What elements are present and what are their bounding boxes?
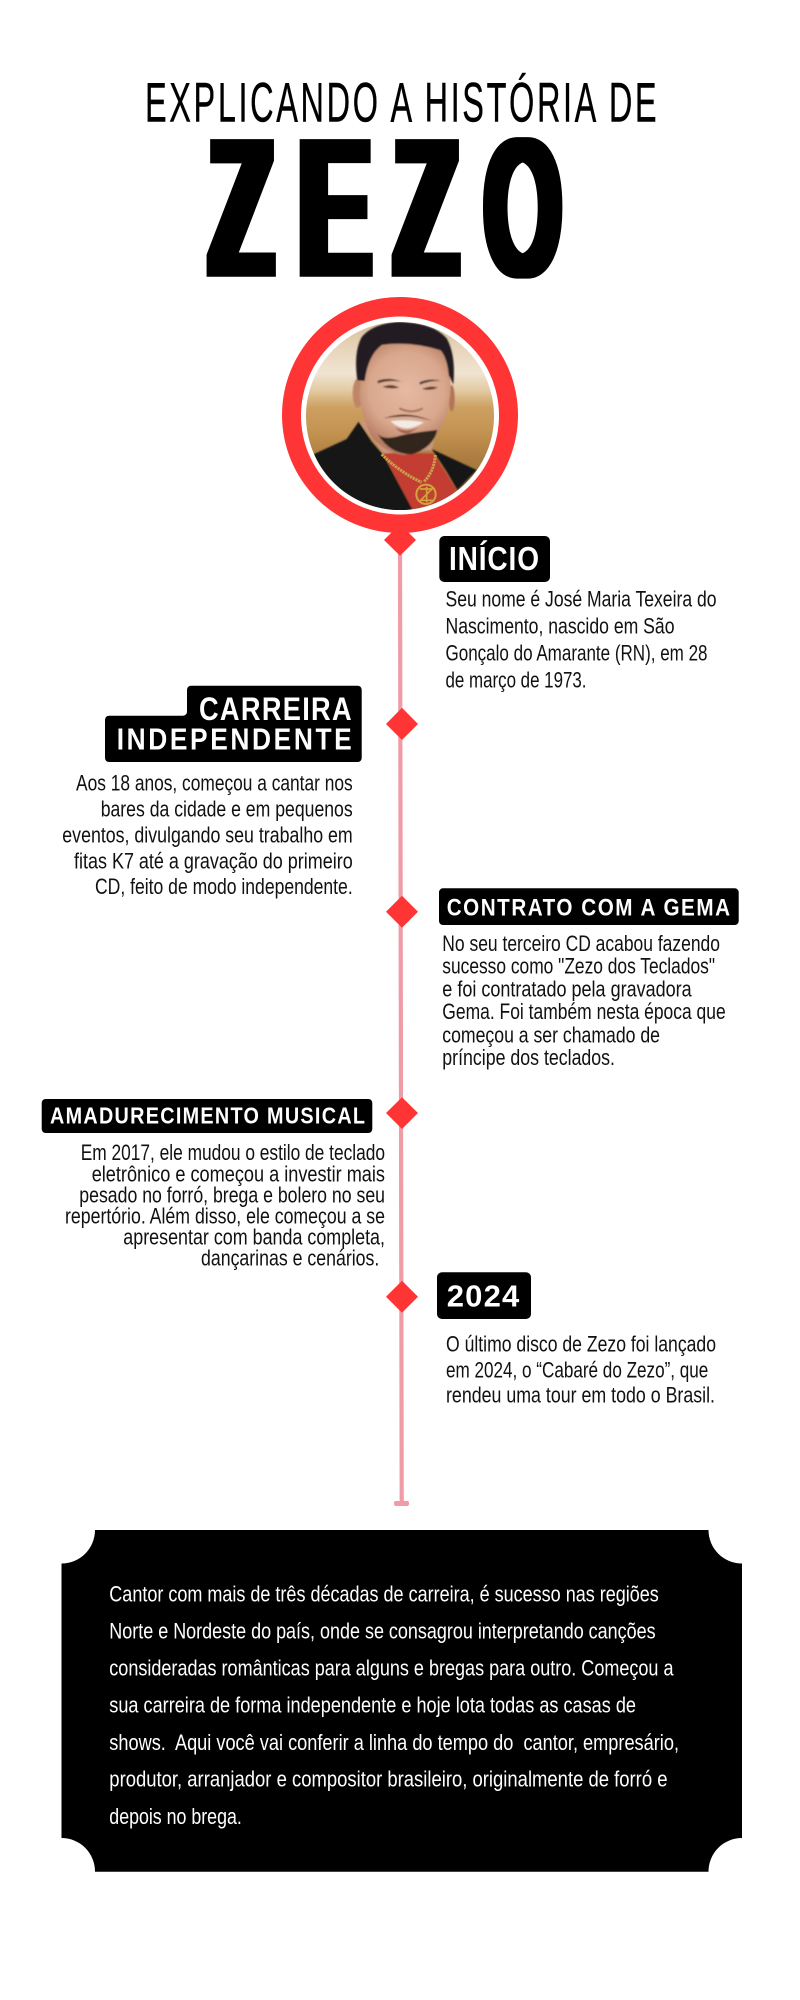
title: ZEZO: Z	[212, 98, 271, 318]
text block: carreira independente: CD, feito de modo independente.	[95, 874, 353, 899]
title: ZEZO: O	[484, 99, 562, 319]
heading: amadurecimento musical: AMADURECIMENTO MUSICAL	[50, 1102, 365, 1129]
timeline marker: 2024	[386, 1281, 418, 1313]
timeline marker: amadurecimento musical	[386, 1097, 418, 1129]
text block: início: de março de 1973.	[446, 668, 586, 692]
title: ZEZO	[212, 97, 562, 319]
text block: amadurecimento musical: repertório. Além disso, ele começou a se	[65, 1203, 385, 1228]
text block: summary: depois no brega.	[109, 1804, 242, 1829]
text block: contrato com a gema: No seu terceiro CD acabou fazendo	[442, 931, 720, 956]
heading: início: INÍCIO	[449, 540, 539, 578]
text block: amadurecimento musical	[65, 1140, 385, 1271]
text block: 2024: rendeu uma tour em todo o Brasil.	[446, 1383, 715, 1408]
section: contrato com a gema	[439, 888, 739, 1070]
text block: início: Nascimento, nascido em São	[446, 614, 674, 638]
text block: início: Seu nome é José Maria Texeira do	[446, 587, 716, 612]
text block: carreira independente: Aos 18 anos, começou a cantar nos	[76, 771, 353, 796]
photo: portrait of the singer	[303, 320, 497, 515]
text block: 2024: O último disco de Zezo foi lançado	[446, 1332, 716, 1357]
text block: amadurecimento musical: pesado no forró, brega e bolero no seu	[79, 1182, 385, 1207]
heading: carreira independente: CARREIRA	[199, 692, 352, 728]
timeline marker: carreira independente	[386, 708, 418, 740]
text block: summary	[109, 1582, 679, 1829]
heading: carreira independente: INDEPENDENTE	[117, 722, 352, 757]
title: ZEZO: E	[299, 97, 370, 318]
heading: contrato com a gema: CONTRATO COM A GEMA	[447, 894, 730, 921]
text block: summary: Norte e Nordeste do país, onde se consagrou interpretando canções	[109, 1619, 656, 1644]
text block: carreira independente: fitas K7 até a gravação do primeiro	[74, 849, 353, 874]
title: ZEZO: Z	[397, 98, 456, 318]
panel background with notched corners	[62, 1530, 742, 1872]
section: carreira independente	[62, 686, 362, 899]
text block: 2024: em 2024, o “Cabaré do Zezo”, que	[446, 1358, 708, 1383]
text block: summary: Cantor com mais de três décadas de carreira, é sucesso nas regiões	[109, 1582, 659, 1607]
text block: início: Gonçalo do Amarante (RN), em 28	[446, 640, 708, 666]
title: explicando a história de: EXPLICANDO A HISTÓRIA DE	[145, 71, 657, 134]
text block: contrato com a gema: Gema. Foi também nesta época que	[442, 999, 726, 1024]
text block: contrato com a gema: sucesso como "Zezo dos Teclados"	[442, 953, 715, 978]
section: início	[439, 536, 716, 692]
text block: carreira independente: bares da cidade e em pequenos	[101, 797, 353, 822]
panel: summary	[62, 1530, 742, 1872]
heading: 2024: 2024	[447, 1279, 520, 1314]
text block: início	[446, 587, 716, 692]
timeline line	[394, 545, 409, 1506]
text block: amadurecimento musical: Em 2017, ele mudou o estilo de teclado	[81, 1140, 385, 1165]
timeline marker: início	[384, 524, 416, 556]
section: amadurecimento musical	[42, 1099, 385, 1271]
text block: contrato com a gema: príncipe dos teclados.	[442, 1045, 615, 1070]
text block: summary: produtor, arranjador e compositor brasileiro, originalmente de forró e	[109, 1767, 668, 1792]
text block: contrato com a gema: começou a ser chamado de	[442, 1022, 660, 1047]
heading: início	[439, 536, 550, 582]
heading: carreira independente	[105, 686, 362, 762]
section: 2024	[437, 1272, 716, 1408]
text block: amadurecimento musical: eletrônico e começou a investir mais	[92, 1162, 385, 1187]
heading: contrato com a gema	[439, 888, 739, 925]
text block: carreira independente: eventos, divulgando seu trabalho em	[62, 823, 353, 848]
text block: summary: sua carreira de forma independente e hoje lota todas as casas de	[109, 1693, 636, 1718]
text block: amadurecimento musical: apresentar com banda completa,	[123, 1224, 385, 1249]
timeline marker: contrato com a gema	[386, 896, 418, 928]
text block: 2024	[446, 1332, 716, 1408]
text block: amadurecimento musical: dançarinas e cenários.	[201, 1246, 379, 1271]
text block: carreira independente	[62, 771, 353, 899]
heading: 2024	[437, 1272, 531, 1319]
text block: summary: consideradas românticas para alguns e bregas para outro. Começou a	[109, 1656, 674, 1681]
text block: contrato com a gema	[442, 931, 726, 1070]
text block: summary: shows. Aqui você vai conferir a linha do tempo do cantor, empresário,	[109, 1730, 679, 1755]
portrait: red ring with photo of Zezo	[282, 297, 518, 533]
text block: contrato com a gema: e foi contratado pela gravadora	[442, 977, 692, 1002]
